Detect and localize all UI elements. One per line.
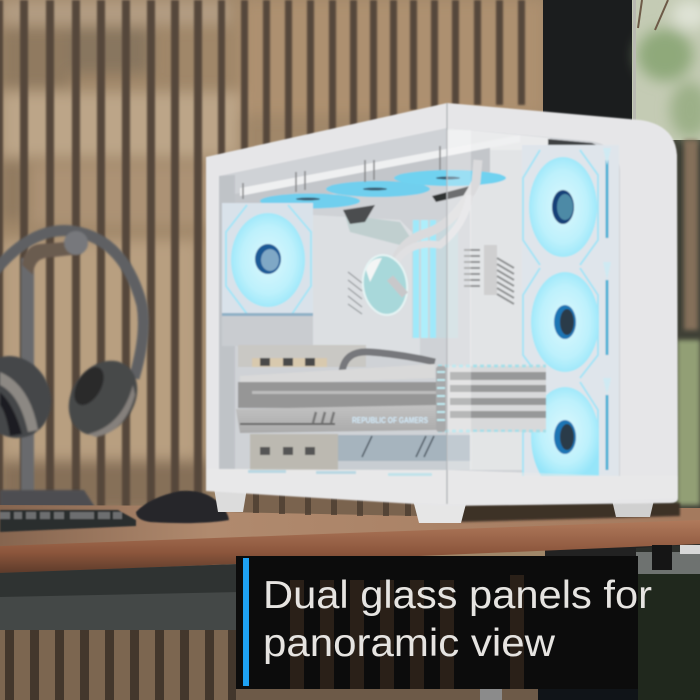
- lower left wall: [222, 316, 314, 346]
- GPU logo text: REPUBLIC OF GAMERS: [352, 416, 429, 425]
- graphics card: [236, 364, 436, 433]
- top fans: [260, 170, 506, 208]
- PCIe slots: [238, 345, 366, 367]
- motherboard shroud: [313, 215, 420, 360]
- power cable: [342, 352, 435, 372]
- case feet: [214, 488, 654, 523]
- slat shadows: [0, 0, 525, 520]
- caption backing: [236, 556, 638, 689]
- bottom light strips: [248, 470, 432, 476]
- GPU cage: [436, 366, 546, 432]
- caption accent bar: [243, 558, 249, 686]
- keyboard: [0, 510, 136, 532]
- left wall of the interior: [219, 175, 235, 469]
- heatsink fins: [464, 250, 514, 304]
- wood slat wall: [0, 0, 545, 700]
- mouse: [136, 491, 229, 523]
- shadow above right fans: [548, 139, 600, 150]
- glass reflection: [447, 130, 471, 470]
- caption text: panoramic view: [263, 622, 556, 665]
- left fan: [222, 203, 313, 316]
- lower right garden: [636, 544, 700, 700]
- desk top surface: [0, 505, 700, 548]
- lower strip under caption: [236, 689, 638, 700]
- headphone stand: [0, 241, 97, 510]
- dark column behind the case: [543, 0, 635, 510]
- caption wall stripes: [290, 575, 524, 689]
- lower slats: [0, 630, 240, 700]
- CPU cooler and tubes: [359, 160, 478, 318]
- caption text: Dual glass panels for: [263, 574, 652, 617]
- right fans: [522, 145, 619, 476]
- top inner band: [447, 128, 550, 160]
- rear column: [470, 150, 522, 470]
- under-desk frame: [0, 564, 240, 630]
- case interior: [219, 128, 620, 476]
- glass edge: [446, 103, 448, 504]
- RAM sticks: [412, 220, 458, 338]
- computer case: [206, 103, 678, 506]
- shadow under the case: [460, 503, 680, 522]
- dark fittings under fans: [432, 186, 470, 202]
- lower chamber: [250, 432, 522, 470]
- headphones: [0, 231, 151, 451]
- garden window: [632, 0, 700, 510]
- radiator posts: [243, 146, 440, 199]
- wall seen beneath the case: [225, 490, 420, 516]
- desk front edge: [0, 520, 700, 574]
- case shell: [206, 103, 678, 506]
- radiator: [235, 143, 490, 207]
- bottom front bezel: [206, 469, 678, 504]
